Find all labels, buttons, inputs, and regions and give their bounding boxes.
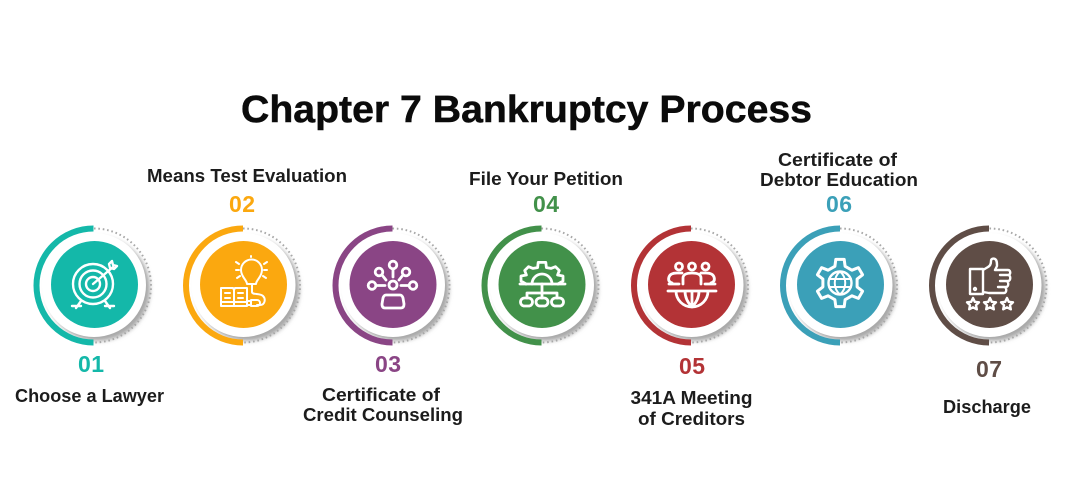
badge 02 [186,228,300,342]
number 04: 04 [533,191,559,217]
number 01: 01 [78,351,104,377]
label: Discharge: Discharge [943,397,1031,417]
icon: thumbs up with stars [967,259,1013,309]
icon: lightbulb and book [221,256,267,306]
label: 341A Meeting of Creditors: of Creditors [638,409,745,429]
step 05: 341A Meeting of Creditors [630,228,752,429]
badge 03 [336,228,450,342]
step 06: Certificate of Debtor Education [760,150,918,342]
label: Certificate of Debtor Education: Certificate of [778,150,898,170]
label: Certificate of Credit Counseling: Credit Counseling [303,405,463,425]
step 03: Certificate of Credit Counseling [303,228,463,425]
number 05: 05 [679,353,705,379]
number 06: 06 [826,191,852,217]
label: Certificate of Credit Counseling: Certificate of [322,385,441,405]
step 07: Discharge [932,228,1046,417]
number 07: 07 [976,356,1002,382]
number 02: 02 [229,191,255,217]
label: Means Test Evaluation: Means Test Evaluation [147,166,347,186]
label: Certificate of Debtor Education: Debtor Education [760,170,918,190]
icon: people and globe [668,263,716,307]
badge 07 [932,228,1046,342]
label: File Your Petition: File Your Petition [469,169,623,189]
step 04: File Your Petition [469,169,623,342]
label: 341A Meeting of Creditors: 341A Meeting [630,388,752,408]
icon: network nodes [368,261,417,308]
badge 01 [37,228,151,342]
step 02: Means Test Evaluation [147,166,347,342]
step 01: Choose a Lawyer [15,228,164,406]
icon: gear with globe [817,259,863,307]
icon: gear and hierarchy [520,262,565,306]
number 03: 03 [375,351,401,377]
badge 05 [634,228,748,342]
label: Choose a Lawyer: Choose a Lawyer [15,386,164,406]
badge 06 [783,228,897,342]
title: Chapter 7 Bankruptcy Process [241,89,812,131]
badge 04 [484,228,598,342]
icon: target [72,261,117,308]
